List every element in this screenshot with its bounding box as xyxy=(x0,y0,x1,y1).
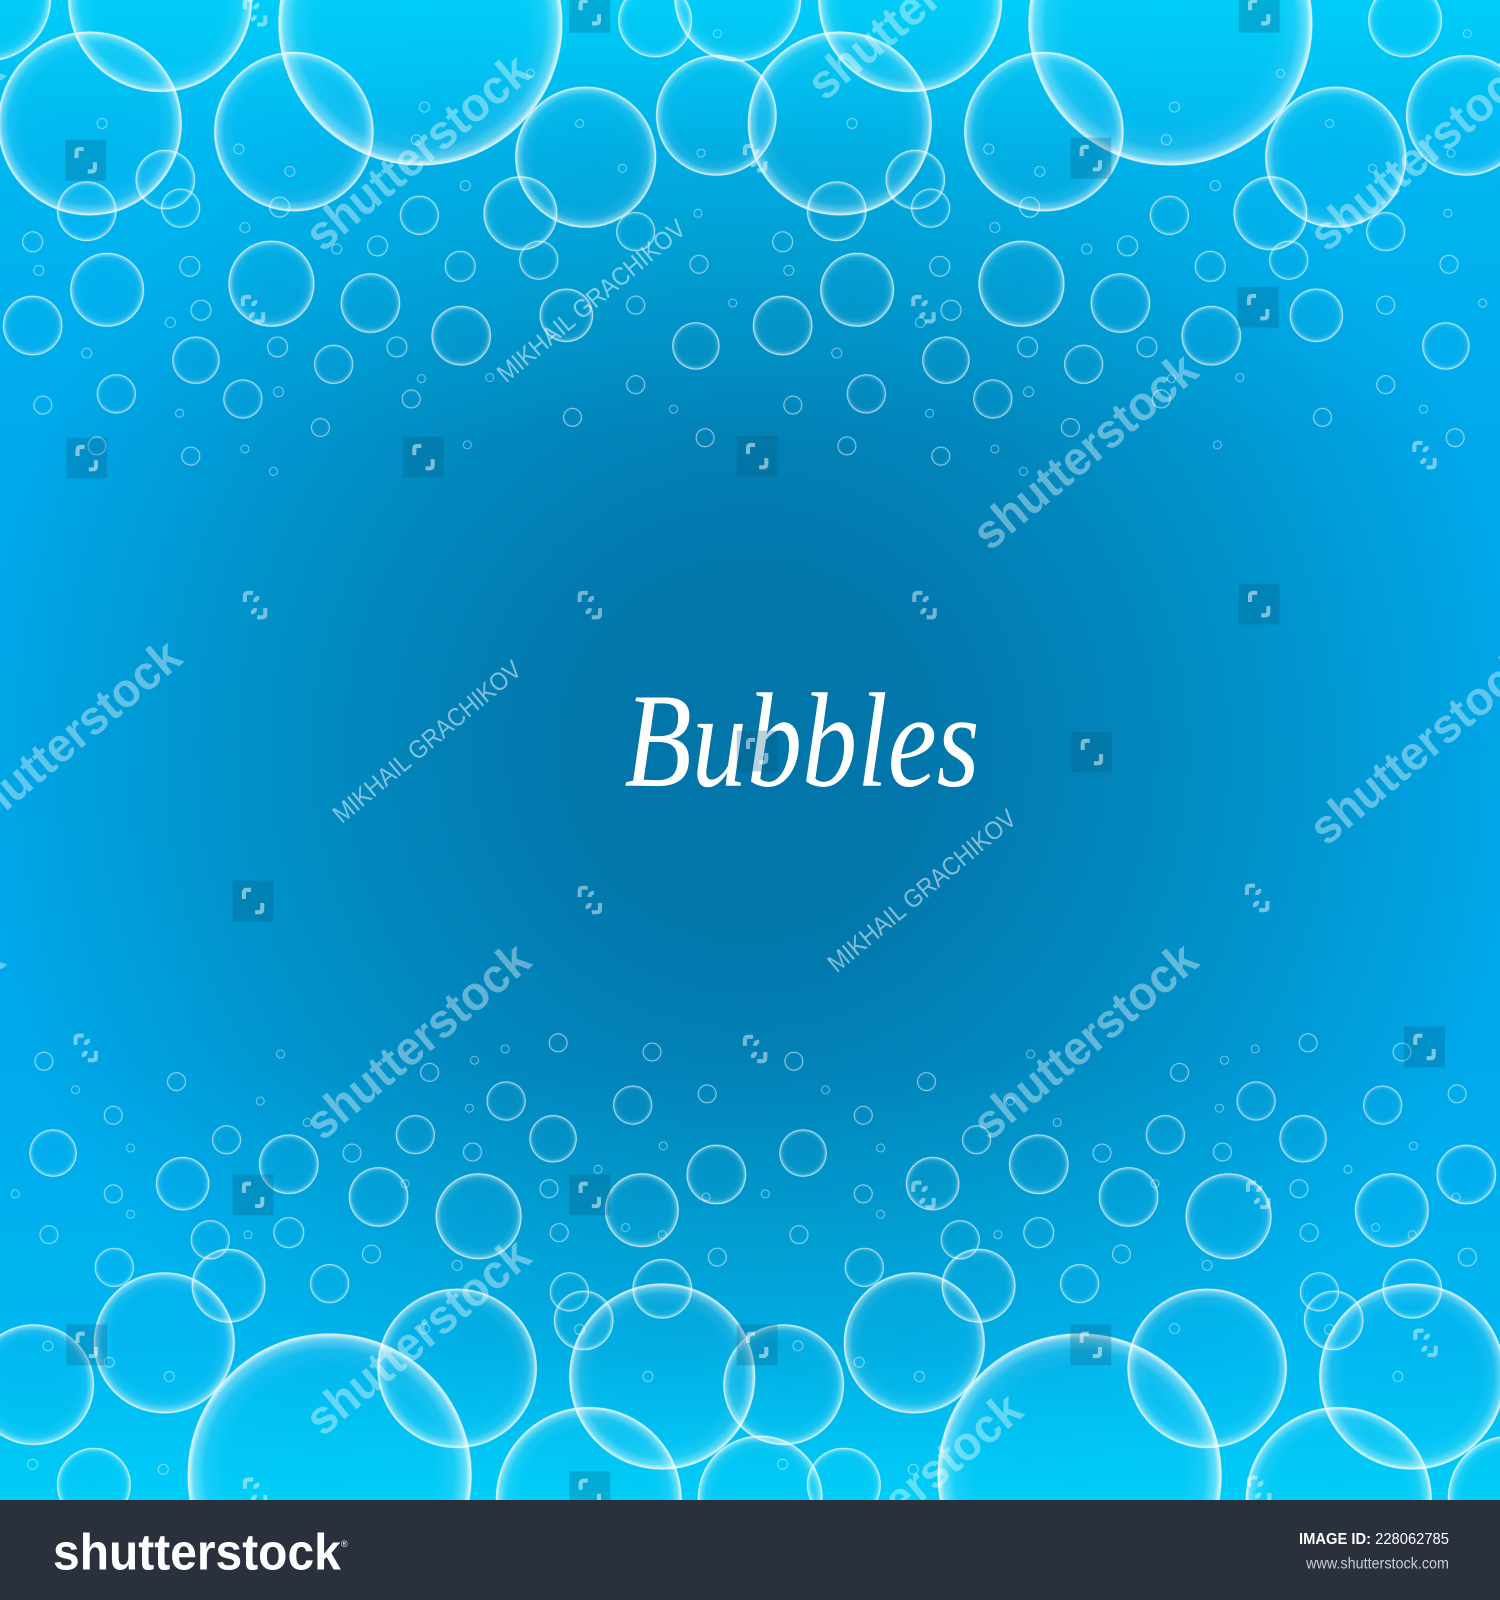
watermark: author names: MIKHAIL GRACHIKOV xyxy=(328,655,527,829)
footer bar xyxy=(0,1500,1500,1600)
top bubbles, left tile xyxy=(0,0,777,476)
watermark: shutterstock wordmarks: shutterstock xyxy=(295,44,541,261)
watermark: author names xyxy=(328,215,1022,978)
watermark: shutterstock wordmarks: shutterstock xyxy=(295,1228,541,1446)
image id: IMAGE ID: 228062785 xyxy=(1299,1531,1449,1548)
watermark: shutterstock wordmarks: shutterstock xyxy=(787,1382,1033,1600)
bottom bubbles, left tile xyxy=(0,1034,755,1600)
top bubbles, right tile xyxy=(748,0,1500,476)
registered mark: ® xyxy=(341,1539,348,1549)
bottom bubbles, right tile xyxy=(723,1034,1500,1600)
footer logo: shutterstock: shutterstock xyxy=(53,1523,341,1580)
watermark: author names: MIKHAIL GRACHIKOV xyxy=(492,215,691,388)
title: Bubbles: Bubbles xyxy=(624,667,980,816)
watermark: shutterstock wordmarks: shutterstock xyxy=(963,932,1208,1150)
watermark: shutterstock wordmarks: shutterstock xyxy=(295,932,541,1150)
website url: www.shutterstock.com xyxy=(1305,1555,1449,1572)
watermark: author names: MIKHAIL GRACHIKOV xyxy=(823,804,1022,978)
watermark: shutterstock wordmarks: shutterstock xyxy=(963,343,1208,560)
